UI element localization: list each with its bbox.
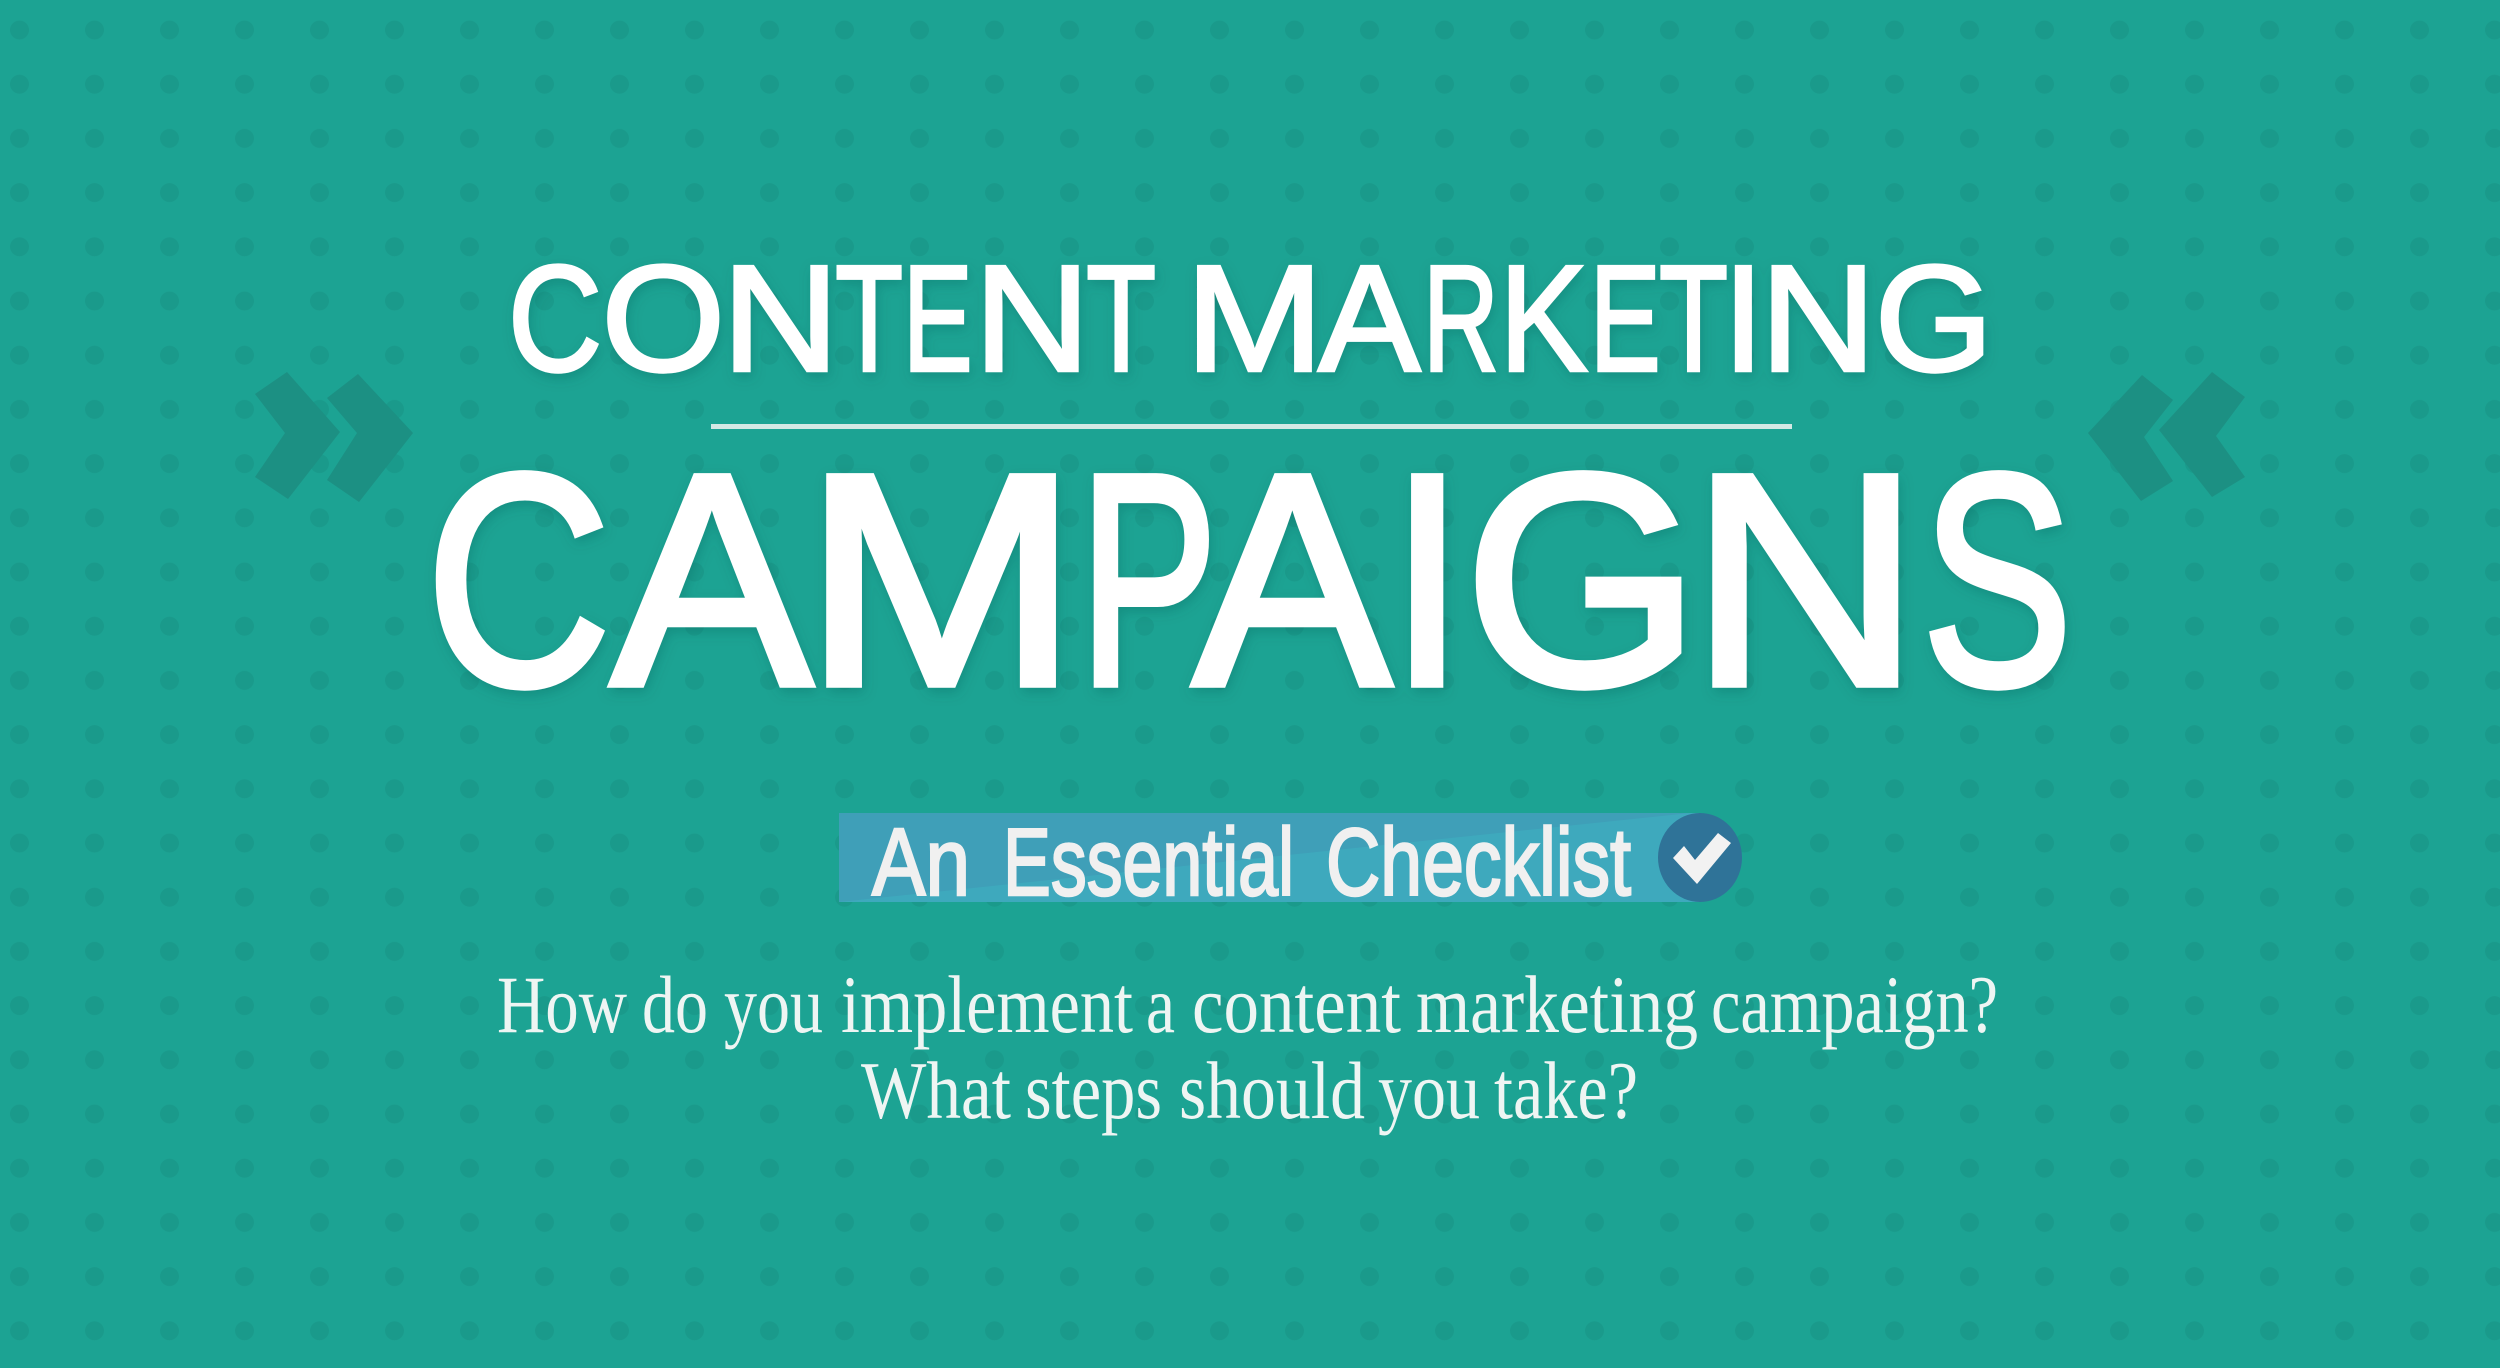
title: content marketing: N: [1760, 234, 1876, 402]
title: content marketing: A: [1318, 234, 1420, 402]
badge text: Checklist: [1326, 809, 1631, 916]
subtitle line 1: you: [724, 959, 823, 1050]
title: campaigns: A: [1194, 412, 1392, 748]
subtitle line 1: implement: [841, 959, 1133, 1050]
subtitle line 1: marketing: [1416, 959, 1698, 1050]
title: campaigns: P: [1079, 412, 1217, 748]
subtitle line 2: should: [1179, 1045, 1365, 1136]
subtitle line 2: steps: [1025, 1045, 1162, 1136]
badge bar: [839, 813, 1699, 902]
icon: check mark circle: [1658, 813, 1742, 902]
subtitle line 1: How: [497, 959, 627, 1050]
title: campaigns: G: [1464, 412, 1700, 748]
badge: an essential checklist: [839, 809, 1742, 916]
title: campaigns: C: [426, 412, 610, 748]
badge text: Essential: [1003, 809, 1294, 916]
subtitle line 1: a: [1146, 959, 1175, 1050]
subtitle question text: [497, 959, 1998, 1136]
title: content marketing: T: [1086, 234, 1154, 402]
subtitle line 2: What: [861, 1045, 1011, 1136]
badge text: An: [872, 809, 970, 916]
title: content marketing: N: [974, 234, 1090, 402]
title: content marketing: I: [1723, 234, 1764, 402]
icon: right double chevron: [2088, 372, 2245, 501]
subtitle line 2: you: [1378, 1045, 1480, 1136]
title: content marketing: T: [1659, 234, 1728, 402]
subtitle line 1: campaign?: [1711, 959, 1998, 1050]
title: content marketing: M: [1185, 234, 1324, 402]
title: content marketing: T: [835, 234, 903, 402]
icon: left double chevron: [255, 372, 413, 502]
title: content marketing: E: [1590, 234, 1661, 402]
title: content marketing: K: [1500, 234, 1587, 402]
title divider: [711, 424, 1792, 429]
title: content marketing: G: [1875, 234, 1993, 402]
title: content marketing: O: [602, 234, 725, 402]
subtitle line 1: do: [642, 959, 708, 1050]
title: campaigns: M: [803, 412, 1079, 748]
title: campaigns: I: [1389, 412, 1465, 748]
subtitle line 2: take?: [1494, 1045, 1638, 1136]
title: campaigns: S: [1922, 412, 2072, 748]
title: campaigns: A: [612, 412, 813, 748]
subtitle line 1: content: [1192, 959, 1401, 1050]
title: content marketing: R: [1423, 234, 1499, 402]
title: content marketing: E: [903, 234, 972, 402]
title: content marketing: N: [722, 234, 839, 402]
title: campaigns: N: [1690, 412, 1920, 748]
badge bar upper tone: [839, 813, 1690, 902]
title: content marketing: C: [508, 234, 602, 402]
